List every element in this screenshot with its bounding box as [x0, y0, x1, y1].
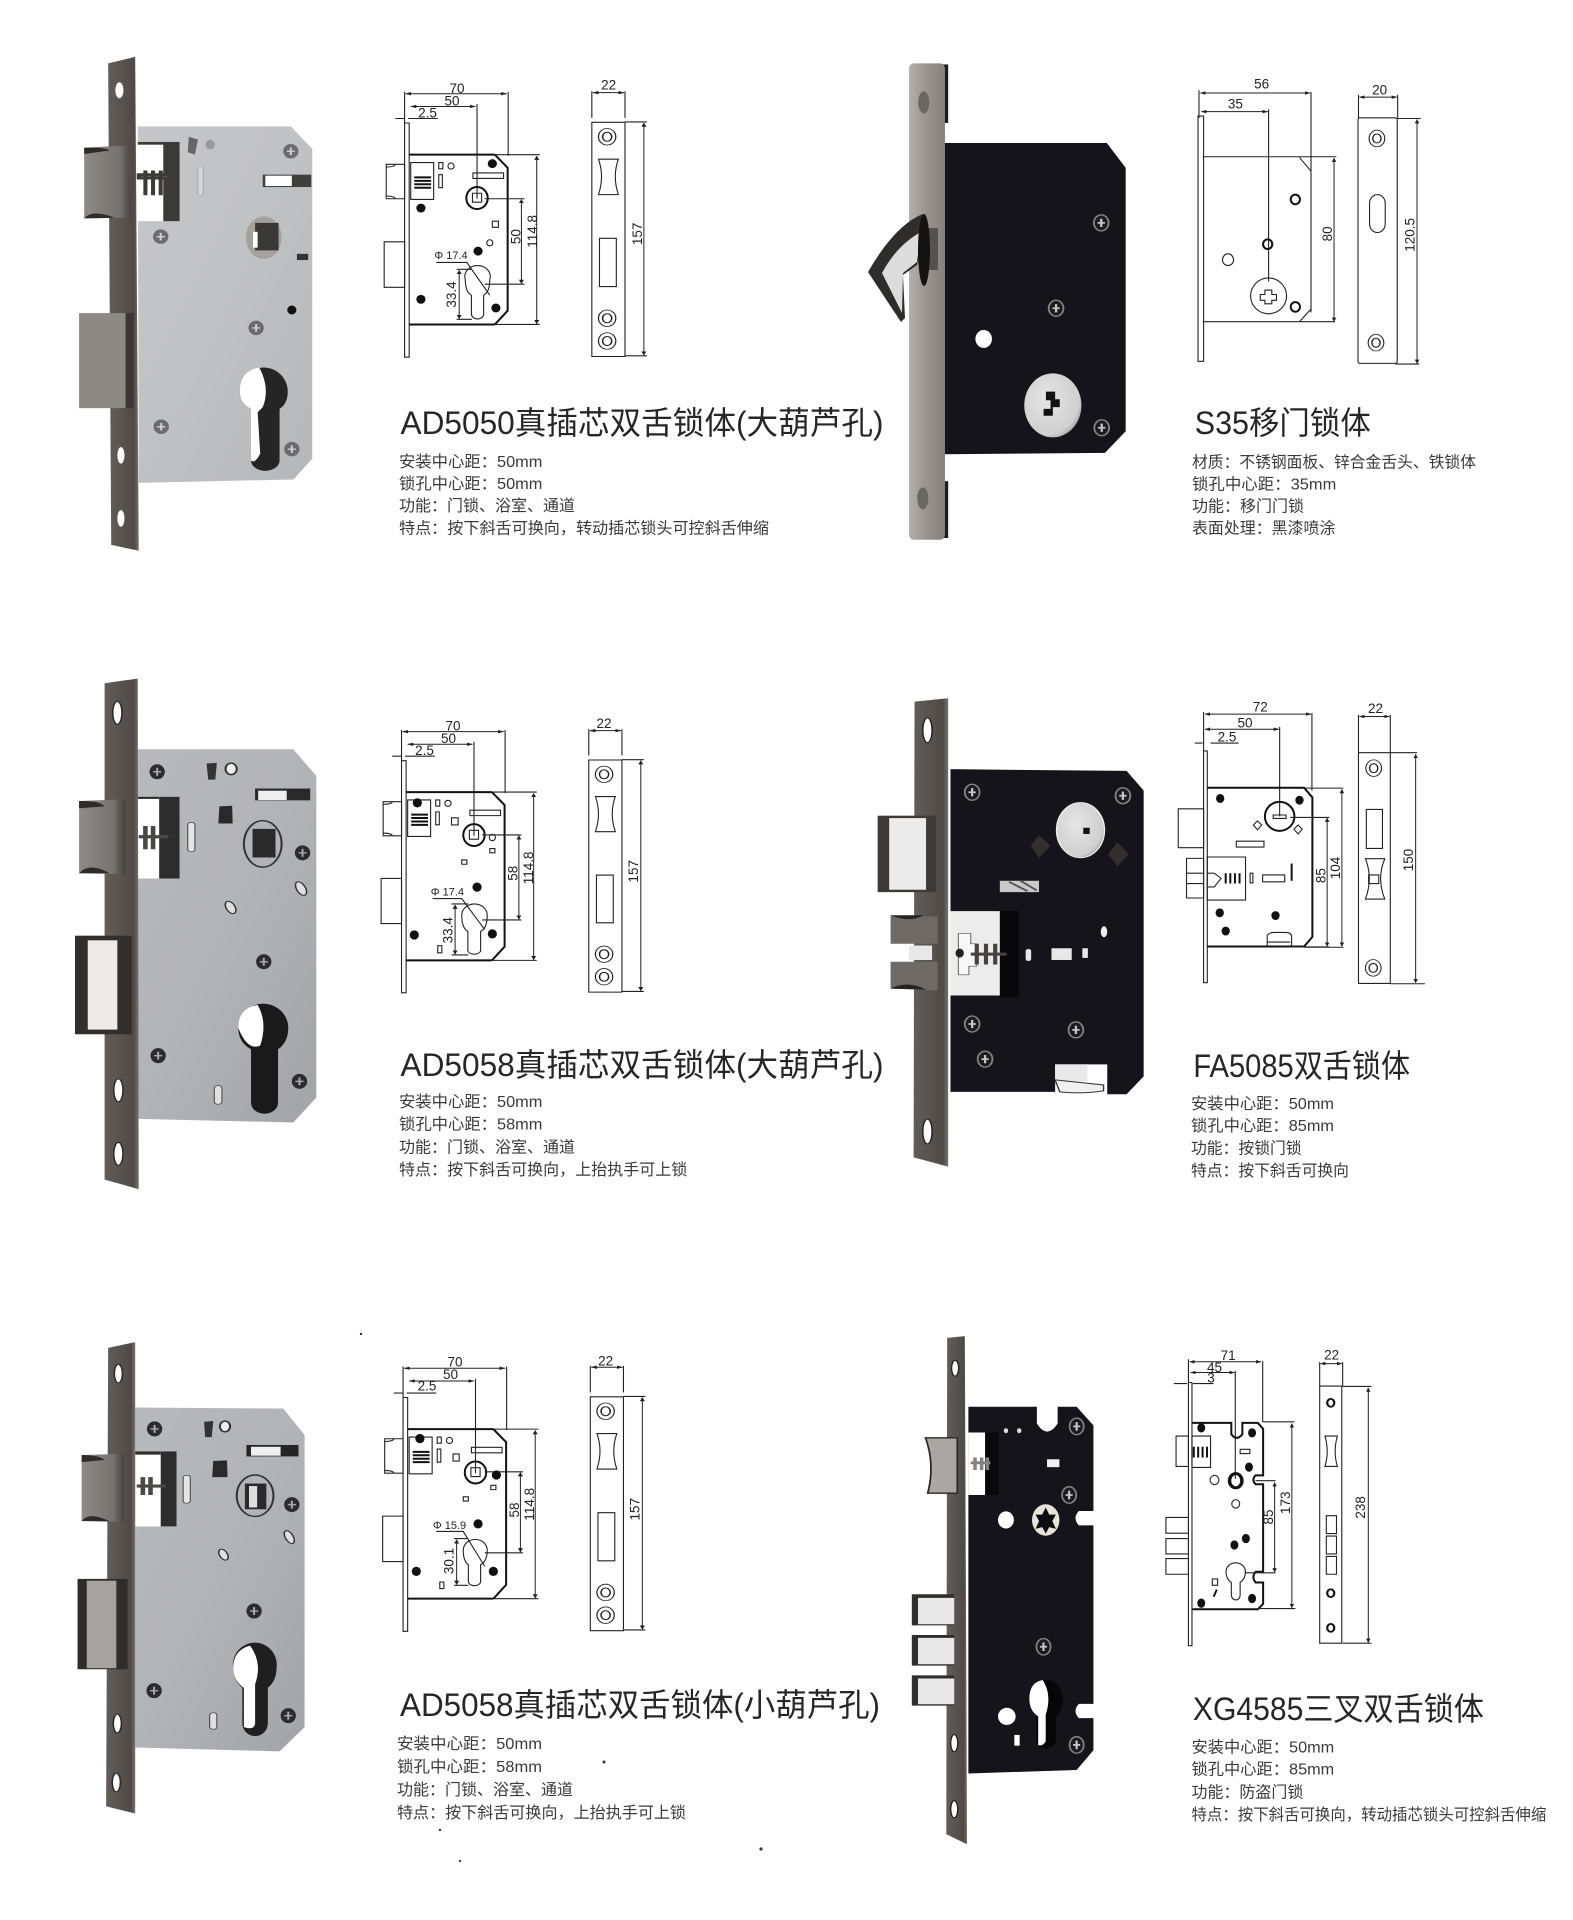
technical drawings: AD5058 small: 157 — [627, 1498, 642, 1520]
specs: FA5085: 安装中心距：50mm — [1191, 1090, 1334, 1114]
technical drawings: XG4585: 3 — [1207, 1370, 1215, 1386]
technical drawings: S35: 56 — [1254, 76, 1269, 92]
specs: AD5050: 功能：门锁、浴室、通道 — [399, 492, 575, 516]
technical drawings: S35: 120.5 — [1402, 218, 1417, 252]
title: AD5058 small: AD5058真插芯双舌锁体(小葫芦孔) — [400, 1687, 880, 1723]
technical drawings: FA5085: 85 — [1313, 868, 1328, 883]
specs: AD5058 small: 功能：门锁、浴室、通道 — [397, 1776, 573, 1800]
panel: AD5058 small cylinder lock — [78, 1342, 880, 1823]
technical drawings: S35 — [1198, 76, 1421, 364]
specs: XG4585: 锁孔中心距：85mm — [1192, 1756, 1334, 1780]
technical drawings: XG4585: 71 — [1221, 1348, 1236, 1363]
specs: AD5058 large — [399, 1088, 687, 1180]
technical drawings: AD5050: 22 — [601, 78, 616, 93]
technical drawings: FA5085: 104 — [1328, 856, 1343, 879]
technical drawings: AD5058 large: 2.5 — [415, 743, 434, 758]
title: AD5058 large: AD5058真插芯双舌锁体(大葫芦孔) — [400, 1047, 884, 1083]
technical drawings: AD5058 small: 2.5 — [418, 1378, 436, 1393]
technical drawings: XG4585: 238 — [1353, 1496, 1368, 1519]
hook handle — [868, 214, 938, 322]
lock photo: XG4585 — [912, 1336, 1093, 1844]
specs: XG4585: 安装中心距：50mm — [1192, 1734, 1334, 1758]
technical drawings: AD5050: 50 — [508, 229, 523, 244]
specs: AD5050 — [399, 448, 769, 538]
technical drawings: AD5058 small: 58 — [507, 1502, 522, 1518]
technical drawings: AD5058 large: 70 — [445, 718, 461, 733]
technical drawings: AD5050: 157 — [630, 223, 645, 245]
lock photo: FA5085 — [878, 698, 1144, 1167]
specs: AD5050: 特点：按下斜舌可换向，转动插芯锁头可控斜舌伸缩 — [399, 514, 769, 538]
technical drawings: AD5050: 2.5 — [418, 106, 437, 120]
technical drawings: FA5085: 150 — [1401, 849, 1416, 871]
specs: XG4585 — [1192, 1734, 1546, 1825]
specs: AD5058 small: 安装中心距：50mm — [397, 1730, 542, 1754]
technical drawings: AD5058 large: 157 — [626, 860, 641, 883]
technical drawings: AD5058 large: 33.4 — [441, 917, 456, 943]
technical drawings: AD5058 small: 30.1 — [442, 1548, 457, 1574]
lock photo: AD5058 small — [78, 1342, 305, 1814]
lock photo: S35 — [868, 63, 1126, 540]
technical drawings: S35: 20 — [1372, 82, 1387, 97]
title: FA5085: FA5085双舌锁体 — [1193, 1048, 1410, 1084]
title: XG4585: XG4585三叉双舌锁体 — [1193, 1691, 1484, 1727]
technical drawings: AD5058 small: 114.8 — [522, 1488, 537, 1521]
specs: S35: 表面处理：黑漆喷涂 — [1192, 514, 1335, 538]
specs: AD5058 small: 锁孔中心距：58mm — [397, 1753, 542, 1777]
title: AD5050: AD5050真插芯双舌锁体(大葫芦孔) — [400, 405, 884, 441]
specs: S35: 锁孔中心距：35mm — [1192, 470, 1336, 494]
technical drawings: FA5085 — [1178, 699, 1425, 984]
specs: XG4585: 功能：防盗门锁 — [1192, 1778, 1303, 1802]
specs: S35: 功能：移门门锁 — [1192, 492, 1304, 516]
panel: S35 sliding door lock — [868, 63, 1476, 540]
technical drawings: AD5058 large: 114.8 — [521, 852, 536, 884]
specs: AD5058 large: 特点：按下斜舌可换向，上抬执手可上锁 — [399, 1156, 687, 1180]
specs: AD5050: 安装中心距：50mm — [399, 448, 542, 472]
specs: FA5085: 锁孔中心距：85mm — [1191, 1112, 1334, 1136]
technical drawings: XG4585: 22 — [1324, 1347, 1339, 1362]
technical drawings: FA5085: 50 — [1237, 716, 1253, 730]
panel: XG4585 lock — [912, 1336, 1546, 1844]
technical drawings: FA5085: 22 — [1368, 701, 1383, 716]
specs: AD5050: 锁孔中心距：50mm — [399, 470, 542, 494]
technical drawings: AD5058 small — [383, 1354, 645, 1631]
lock photo: AD5050 — [79, 57, 312, 551]
technical drawings: AD5050: 33.4 — [444, 281, 459, 308]
technical drawings: XG4585: 173 — [1278, 1492, 1293, 1514]
technical drawings: AD5050: 70 — [449, 81, 465, 96]
technical drawings: AD5058 large: 58 — [505, 866, 520, 881]
technical drawings: AD5058 small: Φ 15.9 — [433, 1520, 466, 1532]
technical drawings: AD5058 small: 50 — [443, 1367, 458, 1382]
specs: AD5058 large: 功能：门锁、浴室、通道 — [399, 1134, 575, 1158]
specs: AD5058 large: 安装中心距：50mm — [399, 1088, 542, 1112]
specs: AD5058 small: 特点：按下斜舌可换向，上抬执手可上锁 — [397, 1799, 686, 1823]
technical drawings: AD5058 large: 22 — [596, 716, 612, 731]
specs: FA5085 — [1191, 1090, 1349, 1181]
technical drawings: XG4585: 45 — [1207, 1360, 1222, 1375]
panel: FA5085 lock — [878, 698, 1425, 1181]
technical drawings: AD5058 large — [381, 716, 644, 993]
panel: AD5058 large cylinder lock — [75, 679, 884, 1189]
lock photo: AD5058 large — [75, 679, 316, 1189]
specs: XG4585: 特点：按下斜舌可换向，转动插芯锁头可控斜舌伸缩 — [1192, 1801, 1546, 1825]
technical drawings: FA5085: 2.5 — [1218, 730, 1236, 745]
specs: S35: 材质：不锈钢面板、锌合金舌头、铁锁体 — [1192, 448, 1476, 472]
technical drawings: AD5050: 50 — [444, 94, 460, 108]
technical drawings: S35: 35 — [1228, 96, 1243, 112]
technical drawings: AD5050: 114.8 — [525, 215, 540, 248]
technical drawings: AD5058 large: Φ 17.4 — [431, 887, 464, 899]
technical drawings: AD5050 — [384, 78, 647, 357]
technical drawings: AD5058 large: 50 — [441, 731, 456, 746]
title: S35: S35移门锁体 — [1195, 405, 1371, 441]
technical drawings: AD5058 small: 70 — [447, 1354, 463, 1369]
technical drawings: S35: 80 — [1320, 226, 1335, 241]
technical drawings: AD5058 small: 22 — [598, 1354, 613, 1369]
specks — [360, 1333, 763, 1862]
technical drawings: FA5085: 72 — [1253, 699, 1268, 714]
technical drawings: AD5050: Φ 17.4 — [434, 250, 468, 262]
technical drawings: XG4585: 85 — [1261, 1509, 1276, 1525]
specs: S35 — [1192, 448, 1476, 538]
specs: AD5058 large: 锁孔中心距：58mm — [399, 1110, 542, 1134]
technical drawings: XG4585 — [1166, 1347, 1371, 1646]
specs: FA5085: 功能：按锁门锁 — [1191, 1134, 1302, 1158]
specs: FA5085: 特点：按下斜舌可换向 — [1191, 1157, 1349, 1181]
specs: AD5058 small — [397, 1730, 686, 1823]
panel: AD5050 lock — [79, 57, 884, 551]
